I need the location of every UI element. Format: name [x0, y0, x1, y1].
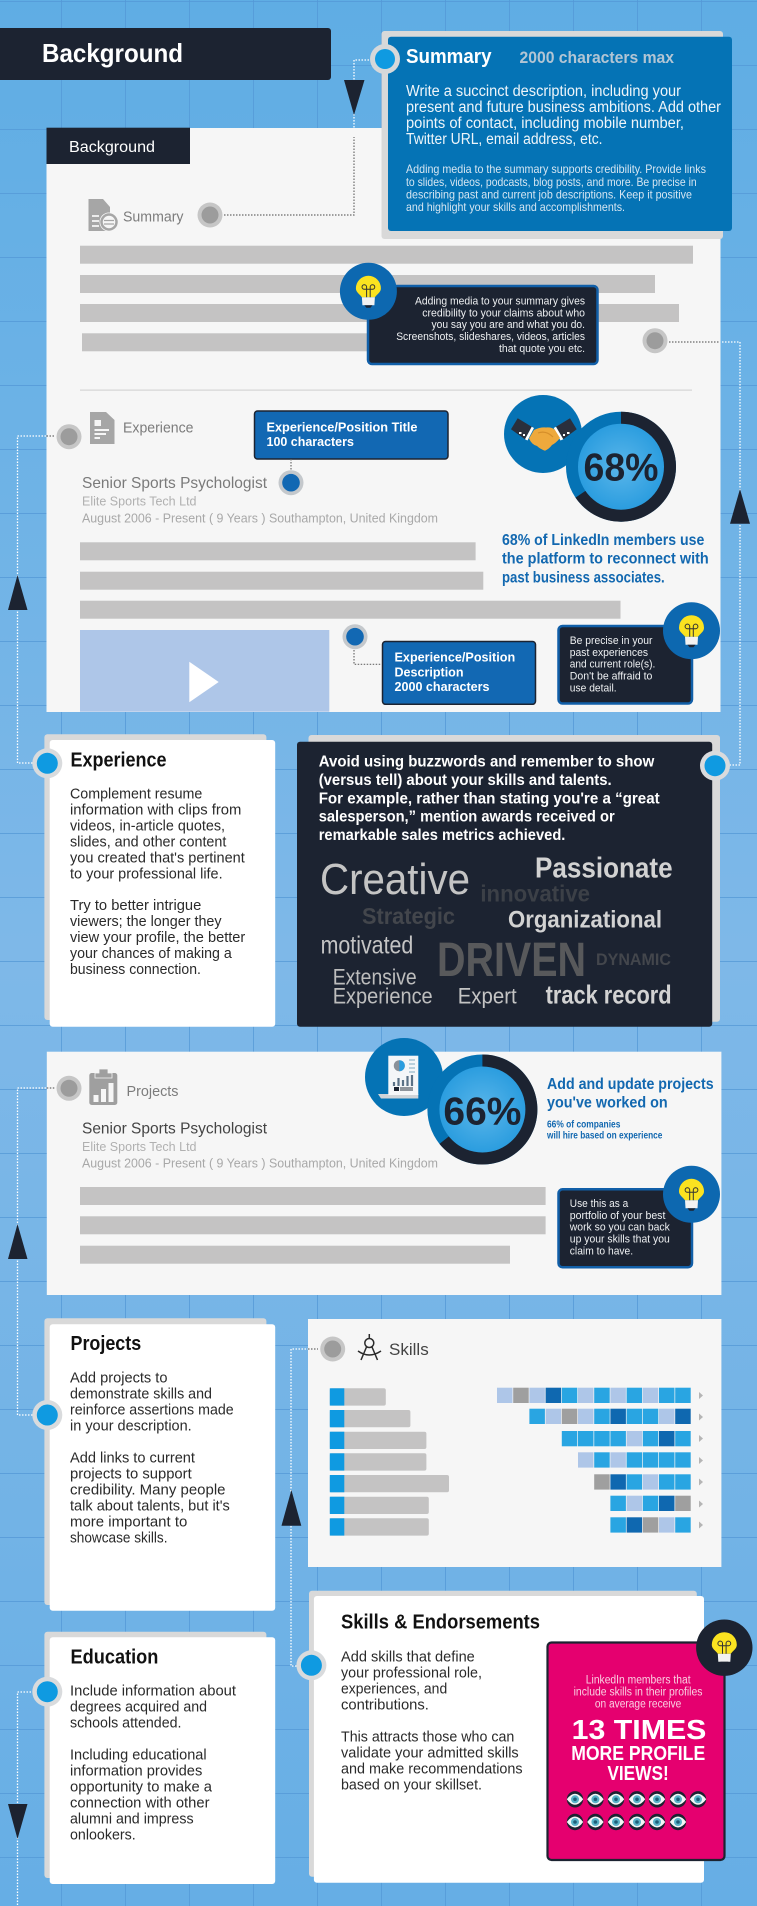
icon: handshake — [504, 395, 582, 473]
node: experience — [56, 424, 82, 449]
node: projects card — [32, 1400, 62, 1430]
chart: 68 percent donut — [566, 412, 676, 522]
divider — [80, 390, 692, 391]
job details: experience — [82, 475, 438, 525]
callout intro: on average receive — [595, 1698, 681, 1710]
card: education — [32, 1632, 275, 1884]
text block: skills: experiences, and — [341, 1681, 447, 1698]
panel: background profile — [46, 128, 720, 712]
stat heading: projects: you've worked on — [547, 1095, 668, 1112]
node: education — [32, 1677, 62, 1707]
word cloud: Creative — [320, 855, 470, 904]
tip: portfolio: portfolio of your best — [570, 1210, 665, 1222]
job details: projects: Senior Sports Psychologist — [82, 1120, 268, 1137]
stat text: 68 percent — [502, 532, 709, 586]
icon: report document — [365, 1038, 443, 1116]
text block: skills: based on your skillset. — [341, 1777, 482, 1794]
label box: position title: Experience/Position Title — [266, 420, 418, 435]
node: buzzwords — [700, 751, 730, 781]
label: skills: Skills — [389, 1340, 429, 1359]
text block: summary media: and highlight your skills and accomplishments. — [406, 200, 625, 214]
text block: projects: talk about talents, but it's — [70, 1497, 230, 1514]
text block: projects: projects to support — [70, 1465, 193, 1482]
label: projects: Projects — [126, 1083, 178, 1100]
label box: position description: Experience/Position — [394, 650, 515, 665]
title banner: Background — [42, 38, 183, 68]
heading: education: Education — [70, 1646, 158, 1668]
node: description — [342, 624, 368, 649]
text block: education: Including educational — [70, 1746, 207, 1763]
text block: experience: viewers; the longer they — [70, 913, 222, 930]
tip: be precise: past experiences — [570, 647, 648, 659]
word cloud: Experience — [333, 983, 433, 1008]
stat heading: projects: Add and update projects — [547, 1076, 714, 1093]
arrow: up skills — [282, 1490, 301, 1526]
tip: portfolio: claim to have. — [570, 1245, 633, 1257]
icon: lightbulb — [340, 263, 397, 320]
placeholder text bars: experience — [80, 542, 620, 619]
node: experience card — [32, 748, 62, 778]
arrow: down education — [8, 1804, 28, 1839]
text block: experience — [70, 785, 246, 978]
chart: 66 percent donut — [427, 1054, 537, 1164]
text block: skills: your professional role, — [341, 1665, 482, 1682]
placeholder text bars: projects — [80, 1187, 546, 1264]
text block: projects: in your description. — [70, 1417, 192, 1434]
job details: projects: Elite Sports Tech Ltd — [82, 1140, 197, 1154]
text block: projects: reinforce assertions made — [70, 1401, 234, 1418]
text block: education: Include information about — [70, 1682, 237, 1699]
icon: lightbulb dark — [696, 1620, 752, 1676]
endorsement row 4 — [578, 1452, 691, 1468]
arrow: down from summary — [344, 80, 364, 115]
panel: summary note — [370, 31, 732, 239]
callout intro: LinkedIn members that — [586, 1674, 691, 1686]
word cloud: Passionate — [535, 853, 673, 885]
text block: summary main: present and future business ambitions. Add other — [406, 99, 721, 116]
text block: skills: validate your admitted skills — [341, 1745, 519, 1762]
tip: portfolio: up your skills that you — [570, 1234, 670, 1246]
arrow: up left side — [8, 575, 28, 610]
text block: skills: contributions. — [341, 1697, 429, 1714]
callout: adding media — [368, 286, 598, 364]
text block: projects: demonstrate skills and — [70, 1385, 212, 1402]
text block: skills: and make recommendations — [341, 1761, 523, 1778]
text block: summary media — [406, 162, 706, 214]
text block: education: connection with other — [70, 1794, 210, 1811]
tip: be precise: use detail. — [570, 682, 617, 694]
text block: projects: more important to — [70, 1513, 187, 1530]
endorsement row 5 — [594, 1474, 691, 1490]
icons: eyes — [567, 1791, 706, 1830]
word cloud: Organizational — [508, 906, 662, 933]
tip: be precise — [558, 626, 692, 704]
text block: experience: to your professional life. — [70, 865, 223, 882]
arrow: up left side projects — [8, 1224, 28, 1259]
callout intro — [574, 1674, 703, 1710]
text block: experience: your chances of making a — [70, 945, 232, 962]
label box: position description: 2000 characters — [394, 679, 490, 694]
heading: summary: Summary — [406, 46, 492, 68]
skill name bars — [330, 1388, 449, 1536]
text block: summary main: Twitter URL, email address, etc. — [406, 131, 602, 148]
text block: skills: Add skills that define — [341, 1649, 475, 1666]
endorsement row 2 — [529, 1409, 691, 1424]
heading: skills and endorsements: Skills & Endorsements — [341, 1611, 540, 1633]
text block: summary main — [406, 83, 721, 148]
stat heading: projects — [547, 1076, 714, 1112]
text block: education: schools attended. — [70, 1714, 182, 1731]
text block: buzzwords advice: remarkable sales metrics achieved. — [319, 827, 565, 844]
heading: character limit: 2000 characters max — [520, 48, 675, 67]
callout figure: MORE PROFILE — [571, 1743, 705, 1765]
text block: experience: videos, in-article quotes, — [70, 817, 225, 834]
stat text: 66 percent: 66% of companies — [547, 1119, 621, 1130]
text block: education: opportunity to make a — [70, 1778, 213, 1795]
text block: summary main: points of contact, including mobile number, — [406, 115, 684, 132]
word cloud: track record — [546, 980, 672, 1010]
stat text: 68 percent: past business associates. — [502, 569, 665, 586]
text block: experience: information with clips from — [70, 801, 241, 818]
chart: 68 percent donut: 68% — [584, 446, 658, 490]
text block: buzzwords advice — [319, 754, 660, 844]
icon: lightbulb — [663, 602, 720, 659]
chart: 66 percent donut: 66% — [443, 1090, 521, 1133]
icon: projects clipboard — [89, 1069, 117, 1105]
word cloud: Extensive — [333, 964, 417, 989]
tip: be precise: and current role(s). — [570, 659, 655, 671]
job details: projects: August 2006 - Present ( 9 Years ) Southampton, United Kingdom — [82, 1156, 438, 1170]
callout: adding media: Adding media to your summary gives — [415, 296, 585, 308]
node: skills card — [296, 1650, 326, 1680]
stat text: 66 percent — [546, 1119, 663, 1141]
callout figure — [571, 1714, 706, 1785]
word cloud: motivated — [321, 931, 413, 959]
callout intro: include skills in their profiles — [574, 1686, 703, 1698]
node: projects — [56, 1076, 82, 1101]
tip: portfolio — [558, 1189, 692, 1267]
title banner — [0, 28, 331, 80]
icon: lightbulb — [663, 1166, 720, 1223]
row chevrons — [699, 1392, 703, 1528]
text block: projects: credibility. Many people — [70, 1481, 226, 1498]
text block: summary media: to slides, videos, podcasts, blog posts, and more. Be precise in — [406, 175, 697, 189]
text block: education: alumni and impress — [70, 1810, 194, 1827]
tip: portfolio: work so you can back — [569, 1222, 670, 1234]
text block: buzzwords advice: salesperson,” mention awards received or — [319, 809, 615, 826]
text block: education: degrees acquired and — [70, 1698, 207, 1715]
text block: education — [70, 1682, 237, 1843]
connector: description — [354, 650, 382, 664]
text block: projects — [70, 1369, 234, 1546]
text block: experience: slides, and other content — [70, 833, 227, 850]
tab: background — [46, 128, 190, 164]
icon: compass — [358, 1334, 381, 1360]
text block: summary main: Write a succinct description, including your — [406, 83, 681, 100]
node: summary note — [370, 44, 400, 74]
job details: experience: Senior Sports Psychologist — [82, 475, 268, 492]
callout figure: VIEWS! — [607, 1763, 669, 1785]
text block: projects: Add projects to — [70, 1369, 168, 1386]
tip: portfolio: Use this as a — [570, 1198, 629, 1210]
connector: projects node — [47, 1087, 55, 1089]
text block: skills — [341, 1649, 523, 1794]
card: buzzwords — [297, 735, 730, 1027]
text block: summary media: Adding media to the summary supports credibility. Provide links — [406, 162, 706, 176]
endorsement squares — [497, 1388, 691, 1533]
word cloud: innovative — [480, 881, 590, 907]
job details: experience: Elite Sports Tech Ltd — [82, 495, 197, 509]
callout: adding media: credibility to your claims about who — [422, 307, 585, 319]
text block: projects: Add links to current — [70, 1449, 196, 1466]
callout figure: 13 TIMES — [572, 1714, 706, 1745]
word cloud: DRIVEN — [437, 934, 586, 987]
label: summary: Summary — [123, 209, 184, 226]
connector: skills node — [308, 1348, 318, 1350]
connector: position title — [290, 459, 292, 470]
text block: experience: Complement resume — [70, 785, 202, 802]
text block: experience: view your profile, the better — [70, 929, 245, 946]
text block: projects: showcase skills. — [70, 1529, 168, 1546]
label box: position description: Description — [394, 665, 464, 680]
panel: skills — [308, 1319, 721, 1567]
icon: experience document — [90, 412, 114, 444]
card: skills and endorsements — [296, 1591, 752, 1883]
text block: buzzwords advice: For example, rather than stating you're a “great — [319, 790, 660, 807]
label box: position description — [382, 642, 536, 704]
heading: projects: Projects — [70, 1333, 141, 1355]
text block: buzzwords advice: Avoid using buzzwords and remember to show — [319, 754, 655, 771]
text block: education: onlookers. — [70, 1826, 136, 1843]
tip: be precise: Don't be affraid to — [570, 670, 652, 682]
endorsement row 3 — [562, 1431, 691, 1446]
node: summary — [198, 202, 222, 228]
stat text: 66 percent: will hire based on experience — [546, 1130, 663, 1141]
card: experience — [32, 734, 275, 1027]
connector: experience node — [46, 435, 55, 437]
node: skills — [320, 1336, 345, 1362]
panel: projects profile — [47, 1038, 721, 1295]
icon: summary document — [88, 199, 118, 232]
callout: adding media: you say you are and what you do. — [432, 319, 585, 331]
job details: experience: August 2006 - Present ( 9 Years ) Southampton, United Kingdom — [82, 511, 438, 525]
text block: experience: you created that's pertinent — [70, 849, 246, 866]
arrow: up right side — [730, 489, 750, 524]
placeholder text bars: summary — [80, 246, 693, 351]
connector: summary bars — [669, 341, 720, 343]
stat text: 68 percent: the platform to reconnect with — [502, 551, 709, 568]
text block: skills: This attracts those who can — [341, 1729, 514, 1746]
endorsement row 7 — [610, 1517, 691, 1533]
text block: experience: Try to better intrigue — [70, 897, 201, 914]
video placeholder — [80, 630, 329, 712]
connector: summary row — [224, 137, 354, 215]
card: projects — [32, 1318, 275, 1611]
word cloud: Strategic — [362, 903, 455, 929]
label box: position title: 100 characters — [266, 434, 354, 449]
word cloud: DYNAMIC — [596, 950, 671, 969]
stat text: 68 percent: 68% of LinkedIn members use — [502, 532, 704, 549]
callout: 13 times more views — [548, 1642, 724, 1860]
heading: experience: Experience — [70, 750, 166, 772]
text block: education: information provides — [70, 1762, 202, 1779]
label box: position title — [254, 411, 448, 459]
node: summary bars — [642, 328, 668, 353]
node: position title — [278, 470, 304, 495]
callout: adding media: Screenshots, slideshares, videos, articles — [396, 331, 585, 343]
endorsement row 1 — [497, 1388, 691, 1403]
text block: buzzwords advice: (versus tell) about your skills and talents. — [319, 772, 612, 789]
endorsement row 6 — [610, 1496, 691, 1511]
callout: adding media: that quote you etc. — [499, 343, 585, 355]
job details: projects — [82, 1120, 438, 1170]
tab: background: Background — [69, 139, 155, 156]
tip: be precise: Be precise in your — [570, 635, 653, 647]
text block: summary media: describing past and current job descriptions. Keep it positive — [406, 188, 692, 202]
label: experience: Experience — [123, 420, 194, 437]
text block: experience: business connection. — [70, 961, 201, 978]
word cloud: Expert — [458, 983, 517, 1008]
word cloud — [320, 853, 673, 1010]
